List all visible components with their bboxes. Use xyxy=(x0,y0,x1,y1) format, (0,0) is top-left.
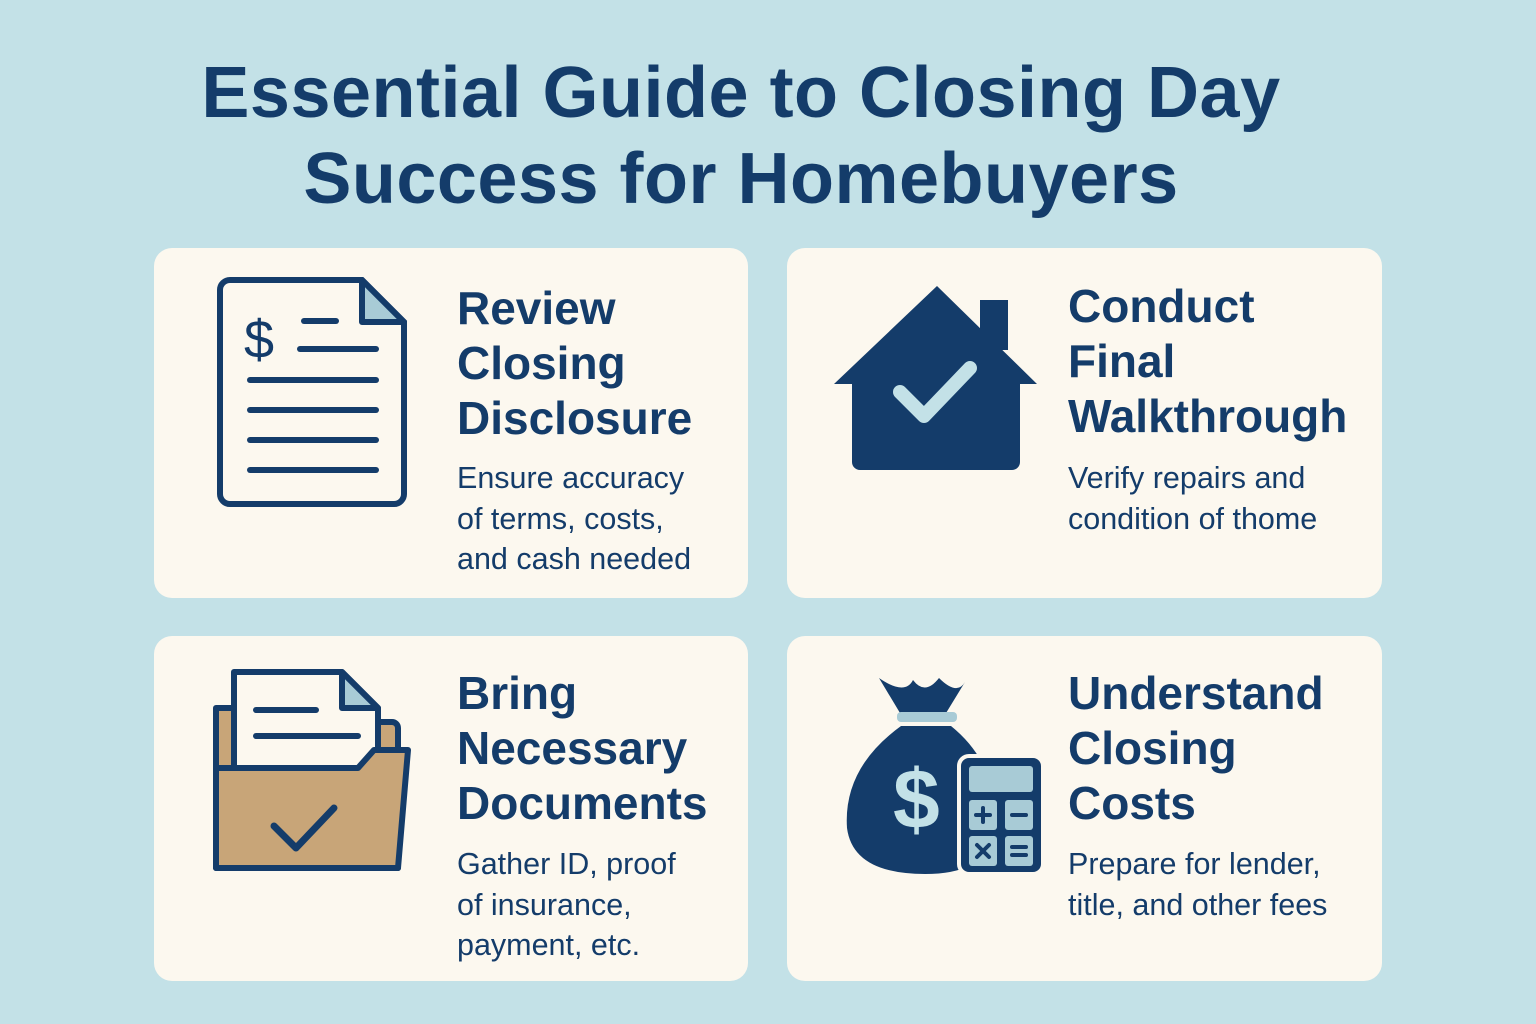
panel: closing costs xyxy=(787,636,1382,981)
body text: Ensure accuracy xyxy=(457,461,684,495)
body text: payment, etc. xyxy=(457,928,640,962)
heading: Necessary xyxy=(457,722,687,774)
heading xyxy=(1068,667,1324,829)
body text: of terms, costs, xyxy=(457,502,664,536)
panel: final walkthrough xyxy=(787,248,1382,598)
body text: of insurance, xyxy=(457,888,632,922)
heading: Disclosure xyxy=(457,392,692,444)
body text xyxy=(457,461,691,576)
body text: condition of thome xyxy=(1068,502,1317,536)
heading xyxy=(457,282,692,444)
body text xyxy=(457,847,676,962)
icon: house with check xyxy=(834,286,1037,470)
icon: money bag and calculator xyxy=(846,678,1041,874)
icon: money bag and calculator: $ xyxy=(893,752,940,846)
body text: Prepare for lender, xyxy=(1068,847,1321,881)
heading: Bring xyxy=(457,667,577,719)
heading: Closing xyxy=(457,337,626,389)
heading xyxy=(1068,280,1347,442)
heading: Documents xyxy=(457,777,707,829)
heading: Final xyxy=(1068,335,1175,387)
body text: Gather ID, proof xyxy=(457,847,676,881)
icon: document xyxy=(217,277,407,507)
body text: and cash needed xyxy=(457,542,691,576)
body text xyxy=(1068,847,1327,922)
heading: Conduct xyxy=(1068,280,1255,332)
heading: Costs xyxy=(1068,777,1196,829)
icon: document: $ xyxy=(244,310,274,370)
title: Essential Guide to Closing Day xyxy=(201,53,1281,133)
title xyxy=(201,53,1281,219)
heading: Understand xyxy=(1068,667,1324,719)
heading: Review xyxy=(457,282,616,334)
body text xyxy=(1068,461,1317,536)
heading: Closing xyxy=(1068,722,1237,774)
icon: folder with document xyxy=(213,669,411,871)
panel: review closing disclosure xyxy=(154,248,748,598)
body text: title, and other fees xyxy=(1068,888,1327,922)
panel: bring documents xyxy=(154,636,748,981)
heading xyxy=(457,667,707,829)
body text: Verify repairs and xyxy=(1068,461,1305,495)
heading: Walkthrough xyxy=(1068,390,1347,442)
title: Success for Homebuyers xyxy=(303,139,1179,219)
